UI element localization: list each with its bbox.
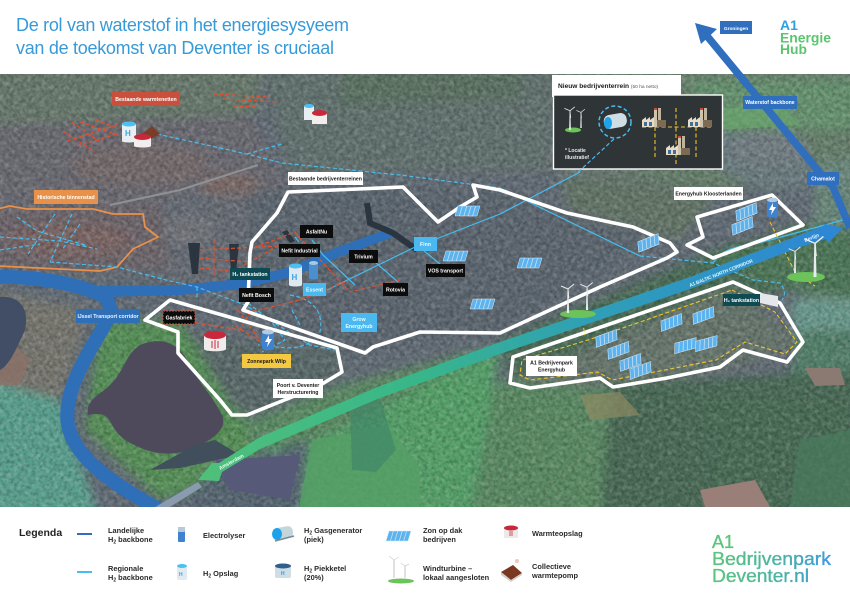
label: Energyhub Kloosterlanden: Energyhub Kloosterlanden — [675, 192, 742, 198]
label: VOS transport: VOS transport — [428, 268, 463, 274]
label: Rotovia — [383, 283, 408, 296]
panel: nieuw bedrijventerrein — [552, 75, 722, 169]
label: A1 Bedrijvenpark Energyhub: Energyhub — [538, 368, 565, 374]
legend: Zon op dak bedrijven: bedrijven — [423, 535, 456, 544]
panel: nieuw bedrijventerrein: illustratief — [565, 155, 589, 161]
label: Gasfabriek — [163, 311, 195, 324]
legend — [19, 525, 583, 584]
panel: nieuw bedrijventerrein: * Locatie — [565, 148, 586, 154]
legend: Collectieve warmtepomp: Collectieve — [532, 562, 571, 571]
fields — [0, 104, 850, 507]
label: Chamalot: Chamalot — [811, 176, 835, 182]
A1 Baltic North corridor arrow: Amsterdam — [218, 453, 246, 472]
label: Historische binnenstad — [34, 190, 98, 204]
legend: H2 Opslag: Opslag — [211, 569, 239, 578]
icon: electrolyser at Poort — [262, 330, 274, 350]
label: Bestaande warmtenetten — [112, 92, 180, 106]
logo: A1 Energie Hub: A1 — [780, 17, 798, 33]
label: Grow Energyhub: Energyhub — [345, 324, 373, 330]
label: Waterstof backbone: Waterstof backbone — [745, 100, 795, 106]
label: Waterstof backbone — [743, 96, 797, 109]
label: Trivium: Trivium — [354, 254, 373, 260]
legend: Warmteopslag — [504, 526, 583, 538]
icon: heat storage at Poort — [204, 331, 226, 351]
white site outlines — [145, 185, 803, 415]
label: Bestaande bedrijventerreinen: Bestaande bedrijventerreinen — [289, 176, 362, 182]
legend: Windturbine: lokaal aangesloten — [423, 573, 490, 582]
company labels — [163, 225, 465, 324]
aerial map background — [0, 64, 850, 520]
wind turbines — [564, 107, 585, 132]
label: H2 tankstation west: H₂ tankstation — [232, 272, 268, 278]
bridge — [155, 482, 202, 507]
label: Chamalot — [807, 172, 839, 185]
label: Rotovia: Rotovia — [386, 288, 405, 294]
label: H2 tankstation east: H₂ tankstation — [724, 298, 759, 304]
label: Grow Energyhub — [341, 313, 377, 332]
label: VOS transport — [426, 264, 465, 277]
panel: nieuw bedrijventerrein: Nieuw bedrijventerrein (50 ha netto) — [558, 83, 659, 90]
label: Historische binnenstad: Historische binnenstad — [37, 195, 95, 201]
regional H2 backbone lines — [0, 134, 843, 352]
label: Nefit Industrial: Nefit Industrial — [281, 248, 318, 254]
label: Essent: Essent — [306, 288, 323, 294]
logo: A1 Bedrijvenpark Deventer.nl: A1 — [712, 532, 734, 552]
label: AsfaltNu — [300, 225, 333, 238]
legend: Regionale H2 backbone: H — [108, 573, 113, 582]
label: H2 tankstation east — [723, 294, 760, 306]
legend: H2 Piekketel: Piekketel — [312, 564, 346, 573]
legend: H2 Piekketel: 2 — [309, 568, 312, 574]
logo: A1 Bedrijvenpark Deventer.nl — [712, 532, 832, 586]
icons: electrolyser and H2 storage at Essent — [289, 261, 318, 286]
legend: H2 Gasgenerator: (piek) — [304, 535, 324, 544]
label: Gasfabriek: Gasfabriek — [166, 316, 193, 322]
legend: Landelijke H2 backbone: Landelijke — [108, 526, 144, 535]
label: IJssel Transport corridor — [76, 309, 140, 323]
legend: H2 Opslag: 2 — [208, 574, 211, 580]
wind turbines on map — [560, 236, 825, 318]
legend: H2 Piekketel — [275, 564, 346, 582]
icon: truck at H2 station — [760, 293, 778, 307]
legend: Electrolyser: Electrolyser — [203, 531, 245, 540]
urban roof tones — [10, 134, 810, 258]
logo: A1 Energie Hub: Energie — [780, 30, 831, 46]
district heating networks — [63, 94, 400, 348]
label: H2 tankstation west — [230, 268, 270, 280]
label: Trivium — [349, 250, 378, 263]
A1 Baltic North corridor arrow — [198, 224, 843, 481]
legend: Landelijke H2 backbone: backbone — [116, 535, 153, 544]
logo: A1 Energie Hub: Hub — [780, 41, 807, 57]
logo: A1 Bedrijvenpark Deventer.nl: Deventer.nl — [712, 566, 809, 586]
national hydrogen backbone arrow — [695, 23, 850, 228]
yellow dashed energy connections — [520, 222, 815, 380]
label: Nefit Bosch — [239, 288, 274, 302]
icon: electrolyser at Kloosterlanden — [767, 198, 778, 218]
gas generator in circle — [599, 106, 631, 138]
icons: electrolyser and H2 storage at Essent: H — [292, 273, 298, 282]
lake — [0, 297, 300, 500]
A1 Baltic North corridor arrow: Berlijn — [804, 233, 820, 244]
label: IJssel Transport corridor: IJssel Transport corridor — [77, 314, 139, 320]
label: Nefit Bosch: Nefit Bosch — [242, 293, 271, 299]
legend: Warmteopslag: Warmteopslag — [532, 529, 583, 538]
label: Poort v. Deventer — [273, 379, 323, 398]
legend: Zon op dak bedrijven — [386, 526, 463, 544]
label: Finn: Finn — [420, 242, 431, 248]
label: Bestaande warmtenetten: Bestaande warmtenetten — [115, 97, 177, 103]
legend: Landelijke H2 backbone: H — [108, 535, 113, 544]
legend: Landelijke H2 backbone: 2 — [113, 540, 116, 546]
icons: storage and heat cluster north — [122, 104, 327, 148]
legend: H2 Piekketel: H — [304, 564, 309, 573]
title — [16, 15, 349, 58]
label: Nefit Industrial — [279, 244, 320, 257]
legend: Windturbine: Windturbine – — [423, 564, 472, 573]
label: Grow Energyhub: Grow — [352, 317, 367, 323]
legend: Windturbine — [388, 556, 490, 584]
logo: A1 Energie Hub — [780, 17, 831, 57]
label: Groningen — [720, 21, 752, 34]
legend: H2 Gasgenerator: Gasgenerator — [312, 526, 362, 535]
dashed link from generator to backbone — [575, 139, 614, 175]
label: A1 Bedrijvenpark Energyhub: A1 Bedrijvenpark — [530, 360, 573, 366]
river IJssel — [0, 203, 417, 510]
label: Energyhub Kloosterlanden — [674, 187, 743, 200]
A1 Baltic North corridor arrow: A1 BALTIC NORTH CORRIDOR — [689, 258, 754, 289]
logo: A1 Bedrijvenpark Deventer.nl: Bedrijvenpark — [712, 549, 832, 569]
legend: Collectieve warmtepomp — [501, 559, 578, 582]
label: Zonnepark Wilp — [242, 354, 291, 368]
legend: Electrolyser — [178, 527, 245, 542]
legend: Regionale H2 backbone: 2 — [113, 578, 116, 584]
legend: H2 Gasgenerator: H — [304, 526, 309, 535]
legend: H2 Opslag: H — [179, 572, 183, 578]
solar roofs — [443, 203, 760, 379]
label: Finn — [414, 237, 437, 251]
legend: H2 Gasgenerator — [272, 525, 362, 544]
label: Essent — [303, 283, 326, 296]
legend: Landelijke H2 backbone — [77, 526, 153, 546]
label: Poort v. Deventer: Herstructurering — [278, 390, 318, 396]
icons: storage and heat cluster north: H — [125, 129, 131, 138]
legend: H2 Opslag — [177, 564, 239, 580]
title: De rol van waterstof in het energiesysyeem — [16, 15, 349, 35]
legend: Regionale H2 backbone: Regionale — [108, 564, 143, 573]
label: A1 Bedrijvenpark Energyhub — [526, 356, 577, 376]
legend: H2 Opslag: H — [203, 569, 208, 578]
legend: Regionale H2 backbone: backbone — [116, 573, 153, 582]
title: van de toekomst van Deventer is cruciaal — [16, 38, 334, 58]
label: AsfaltNu: AsfaltNu — [306, 230, 327, 236]
label: Zonnepark Wilp: Zonnepark Wilp — [247, 359, 286, 365]
legend: Regionale H2 backbone — [77, 564, 153, 584]
label: Groningen: Groningen — [724, 26, 748, 32]
legend: H2 Gasgenerator: 2 — [309, 530, 312, 536]
historic city centre outline — [0, 206, 158, 271]
factories — [642, 108, 712, 155]
legend heading: Legenda — [19, 527, 62, 539]
label: Bestaande bedrijventerreinen — [288, 172, 363, 185]
legend: Collectieve warmtepomp: warmtepomp — [531, 571, 578, 580]
legend: H2 Piekketel: H — [281, 571, 285, 577]
legend: H2 Piekketel: (20%) — [304, 573, 324, 582]
legend: Zon op dak bedrijven: Zon op dak — [423, 526, 463, 535]
label: Poort v. Deventer: Poort v. Deventer — [277, 383, 319, 389]
aerial texture — [0, 74, 850, 507]
